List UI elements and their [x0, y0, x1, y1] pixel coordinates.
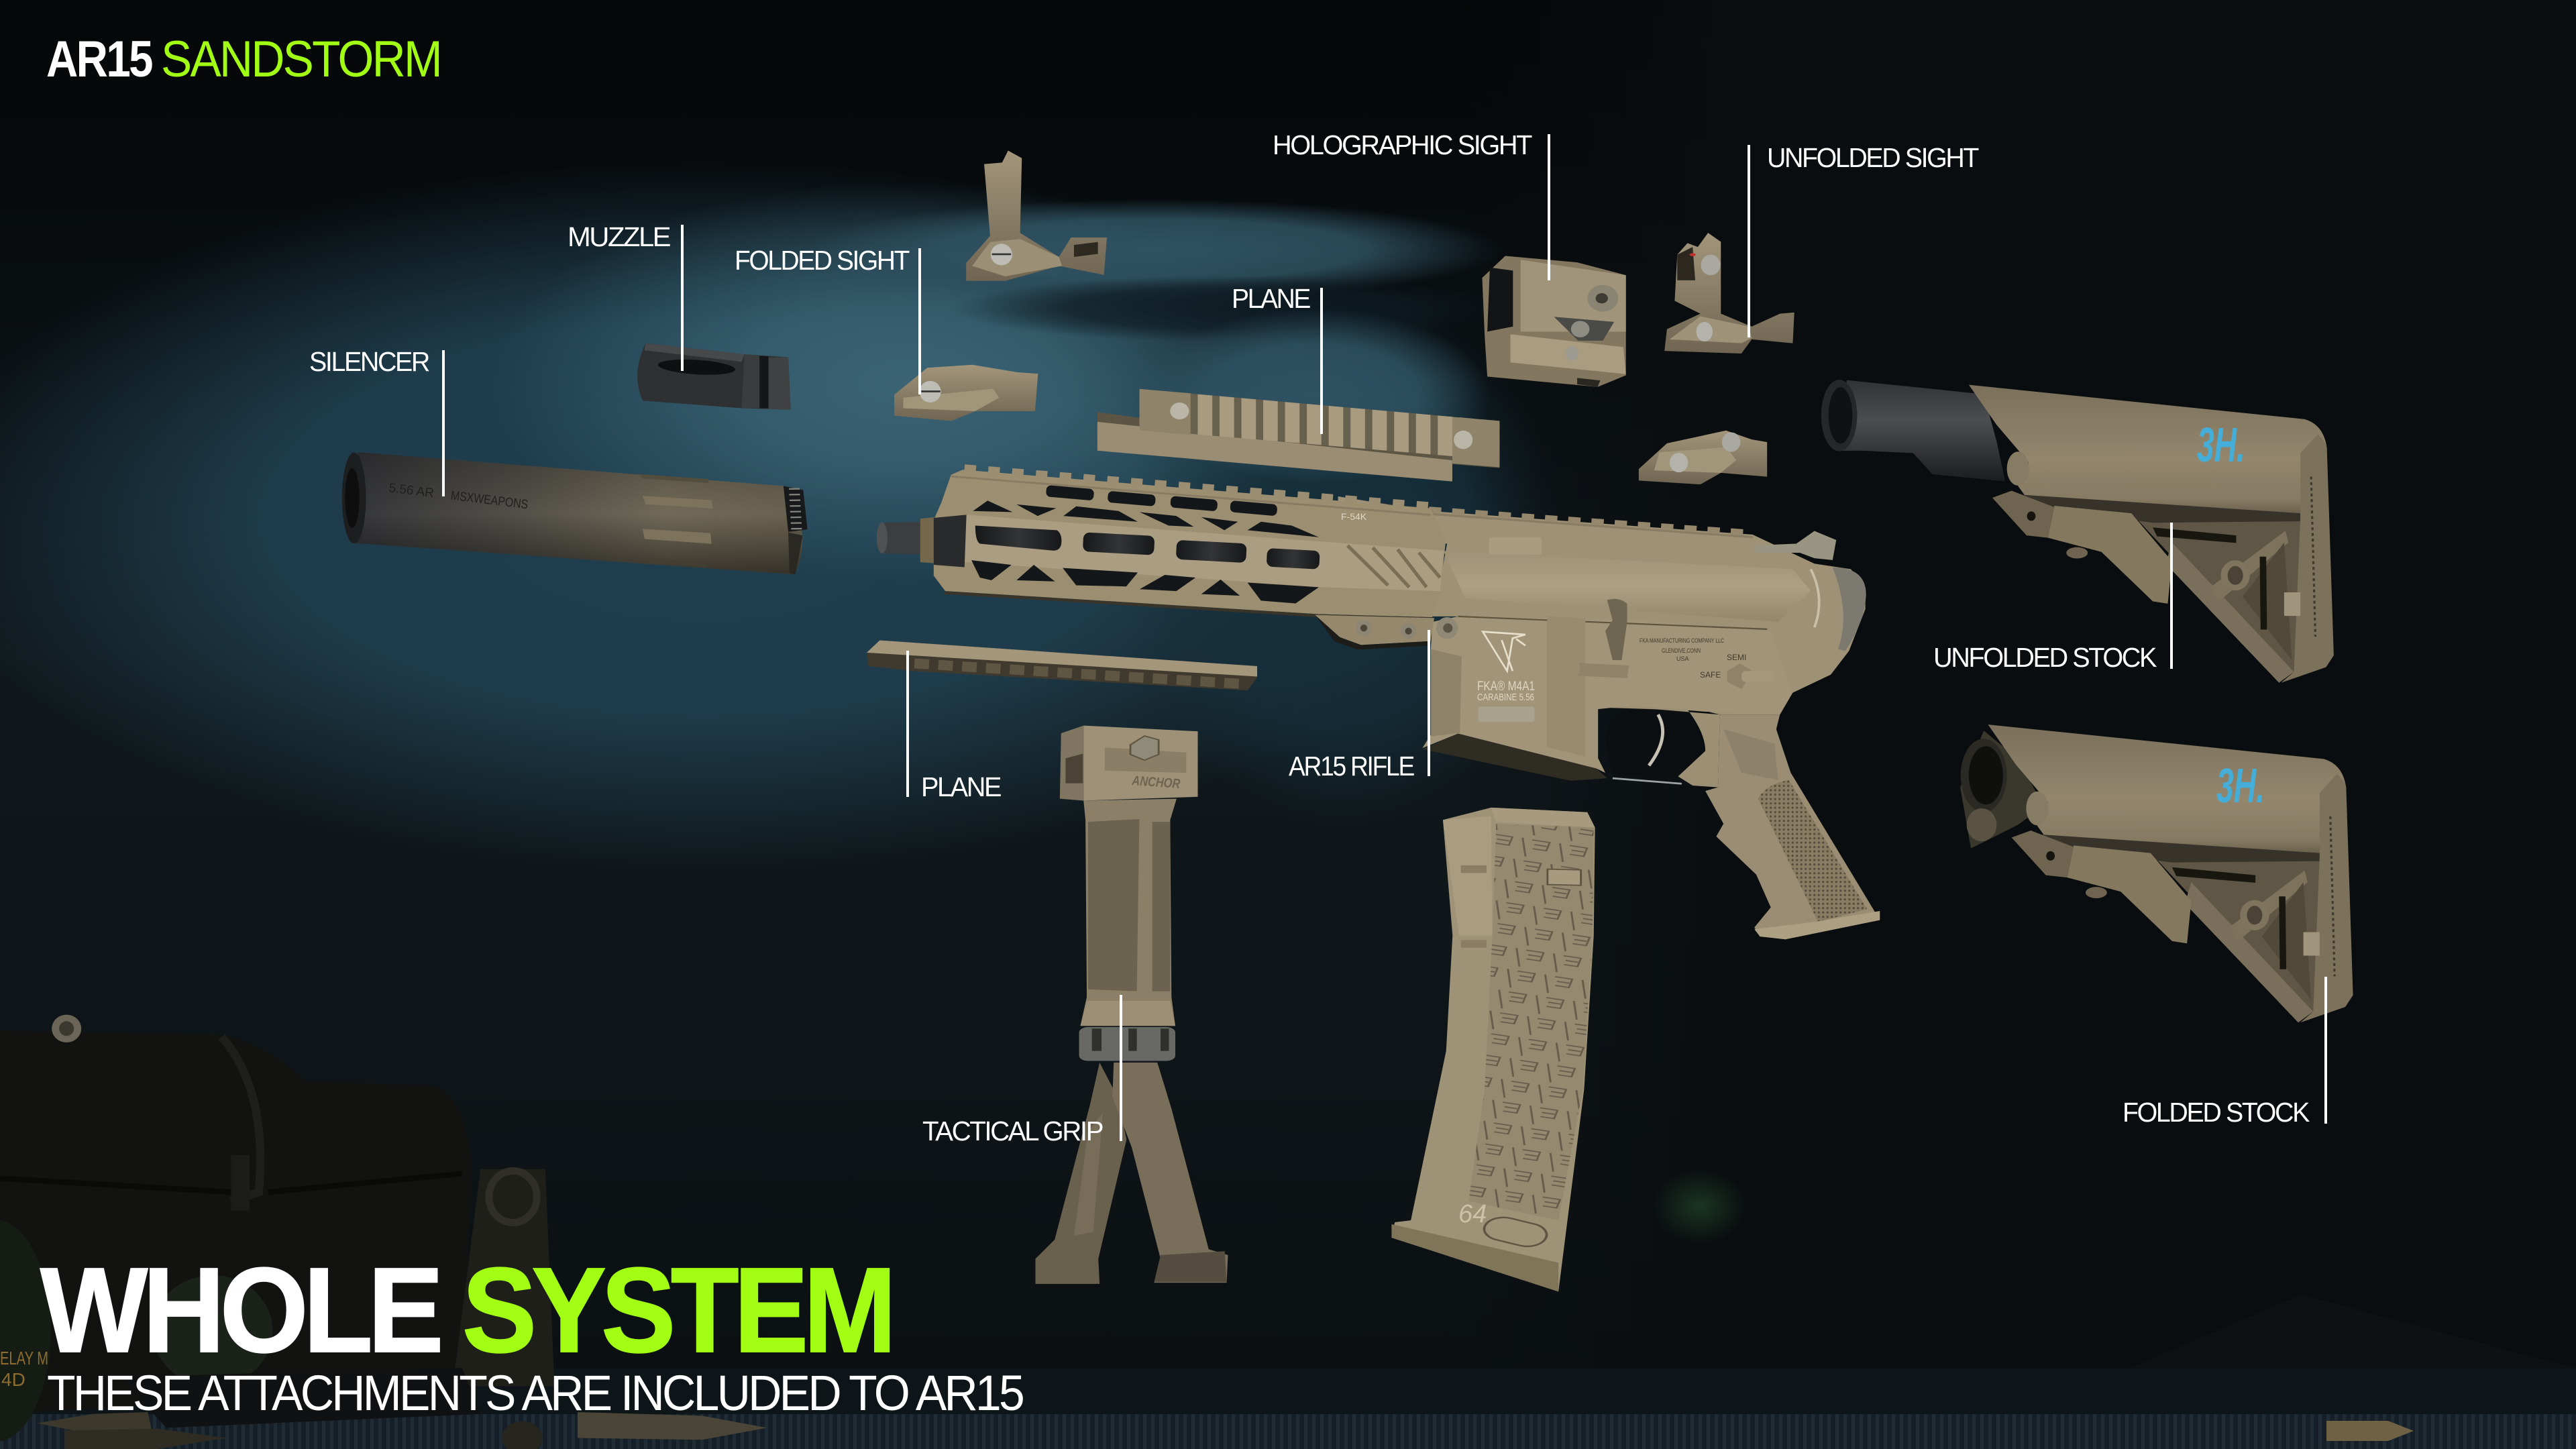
part: folded stock — [1960, 724, 2353, 1022]
rifle engraving — [1341, 511, 1746, 703]
part: silencer — [342, 452, 808, 574]
magazine marking: 64 — [1458, 1200, 1487, 1228]
part: AR15 rifle — [877, 468, 1880, 939]
rifle engraving: USA — [1676, 655, 1689, 662]
unfolded stock logo: 3H. — [2197, 419, 2245, 472]
grip engraving: ANCHOR — [1131, 773, 1181, 792]
silencer engraving — [388, 481, 529, 512]
rifle engraving: CARABINE 5.56 — [1477, 692, 1534, 703]
part: folded sight — [894, 365, 1038, 421]
part: unfolded sight — [1664, 233, 1794, 354]
buffer tube — [1821, 380, 2005, 481]
label: lower plane — [906, 651, 1001, 802]
heading: WHOLE — [40, 1243, 440, 1378]
grip clamp ring — [1079, 1027, 1175, 1061]
receiver and lower — [1338, 496, 1880, 939]
label: tactical grip: TACTICAL GRIP — [922, 1116, 1103, 1146]
bipod legs — [1035, 1063, 1228, 1284]
label: top plane: PLANE — [1232, 283, 1310, 314]
label: unfolded sight: UNFOLDED SIGHT — [1767, 142, 1979, 173]
stock body — [1969, 385, 2334, 683]
folded stock logo: 3H. — [2216, 759, 2265, 813]
part: tactical grip — [1035, 726, 1228, 1284]
bullets on floor — [37, 1412, 767, 1449]
rifle engraving: F-54K — [1341, 511, 1367, 522]
label: silencer — [309, 346, 445, 496]
rifle engraving: FKA MANUFACTURING COMPANY LLC — [1640, 637, 1724, 644]
stock end ring — [1960, 731, 2043, 849]
part: magazine — [1391, 808, 1595, 1291]
part: holographic sight — [1482, 256, 1626, 387]
floor — [0, 1368, 2576, 1449]
equipment case — [0, 1015, 480, 1414]
label: tactical grip — [922, 995, 1122, 1146]
label: unfolded stock — [1933, 523, 2173, 673]
label: AR15 rifle — [1289, 630, 1430, 782]
stock body — [1988, 724, 2353, 1022]
silencer engraving: MSXWEAPONS — [450, 488, 529, 512]
case markings — [0, 1348, 48, 1390]
grenade and props — [0, 1169, 555, 1442]
title — [46, 31, 441, 88]
label: holographic sight — [1273, 129, 1550, 280]
label: AR15 rifle: AR15 RIFLE — [1289, 751, 1414, 782]
case markings: ELAY M — [0, 1348, 48, 1368]
label: silencer: SILENCER — [309, 346, 429, 377]
part: upper plane rail — [1097, 389, 1499, 482]
label: folded sight — [735, 245, 921, 394]
rifle engraving: SAFE — [1700, 670, 1721, 680]
label: unfolded sight — [1748, 142, 1979, 337]
rifle engraving: GLENDIVE,CONN — [1662, 647, 1701, 654]
label: muzzle: MUZZLE — [568, 221, 670, 252]
pistol grip — [1705, 714, 1880, 939]
right side darkening — [1462, 0, 2576, 1409]
grip shaft — [1080, 799, 1177, 1026]
label: folded sight: FOLDED SIGHT — [735, 245, 910, 276]
part: muzzle — [637, 343, 791, 410]
label: folded stock — [2123, 977, 2327, 1128]
label: lower plane: PLANE — [921, 771, 1001, 802]
blue wall glow — [0, 161, 1563, 872]
part: lower plane rail — [867, 641, 1257, 690]
silencer engraving: 5.56 AR — [388, 481, 435, 500]
label: holographic sight: HOLOGRAPHIC SIGHT — [1273, 129, 1532, 160]
heading: SYSTEM — [462, 1243, 892, 1378]
mount block — [1315, 615, 1434, 649]
part: folded sight right — [1639, 431, 1767, 484]
lower receiver — [1422, 599, 1792, 788]
title: AR15 — [46, 31, 152, 88]
label: folded stock: FOLDED STOCK — [2123, 1097, 2310, 1128]
rifle engraving: SEMI — [1727, 653, 1746, 662]
part: flip sight top — [966, 151, 1107, 281]
label: muzzle — [568, 221, 684, 371]
label: unfolded stock: UNFOLDED STOCK — [1933, 642, 2157, 673]
case markings: 4D — [1, 1369, 25, 1390]
grip head block — [1060, 726, 1198, 801]
label: top plane — [1232, 283, 1323, 434]
heading — [40, 1243, 892, 1378]
handguard — [877, 468, 1446, 649]
rifle engraving: FKA® M4A1 — [1477, 680, 1535, 694]
threaded barrel — [877, 515, 967, 567]
title: SANDSTORM — [161, 31, 441, 88]
subtitle: THESE ATTACHMENTS ARE INCLUDED TO AR15 — [47, 1365, 1024, 1421]
bullet right — [2326, 1421, 2414, 1441]
part: unfolded stock — [1821, 380, 2334, 683]
